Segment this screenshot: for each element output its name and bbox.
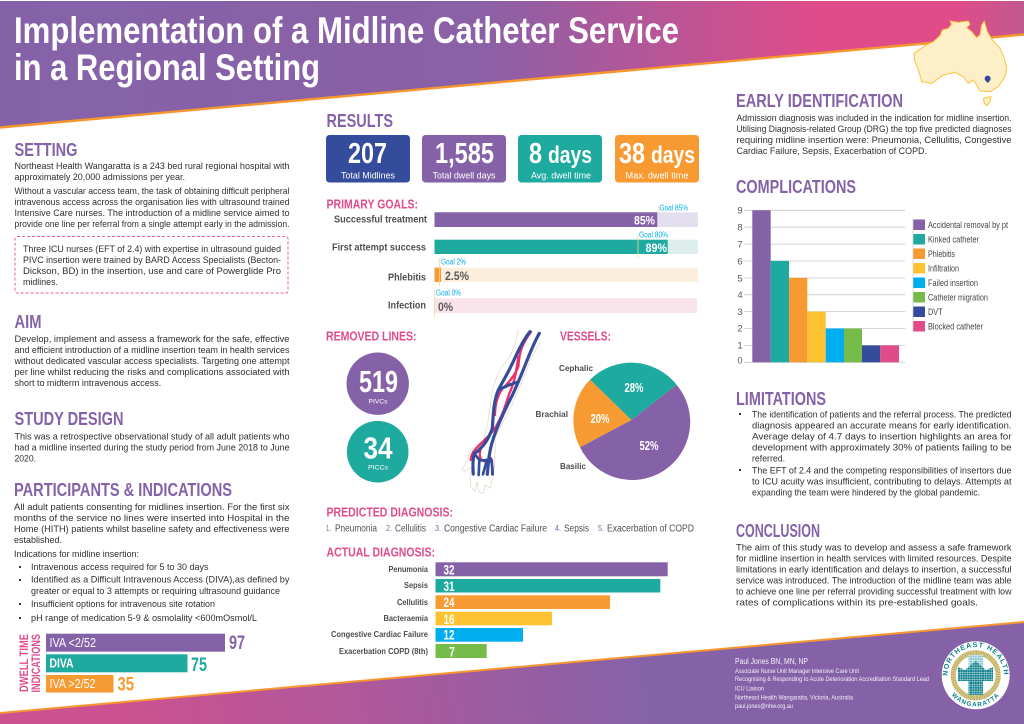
legend: complications: Infiltration [928, 264, 959, 274]
bar chart: dwell time indications: DIVA [50, 656, 74, 670]
author contact details: Paul Jones BN, MN, NP [735, 657, 808, 666]
section: participants and indications: greater or equal to 3 attempts or requiring ultrasound guidance [31, 586, 280, 597]
bar chart: complications: 1 [737, 340, 743, 352]
row: first attempt success: First attempt success [332, 242, 426, 254]
section: limitations: LIMITATIONS [736, 389, 826, 409]
heading: primary goals: PRIMARY GOALS: [326, 198, 418, 212]
stat card: max dwell time [615, 135, 699, 182]
section: participants and indications: Insufficient options for intravenous site rotation [31, 599, 215, 610]
section: participants and indications: All adult patients consenting for midlines insertion. For the first six [14, 502, 290, 513]
bar chart: dwell time indications: IVA <2/52 [50, 636, 96, 650]
section: conclusion [736, 521, 1012, 608]
pie chart: vessels: 20% [590, 411, 610, 426]
section: participants and indications: Indications for midline insertion: [14, 549, 139, 560]
section: limitations: referred. [752, 454, 785, 464]
row: infection [388, 288, 697, 317]
list: predicted diagnoses [326, 524, 694, 534]
bar chart: dwell time indications: 97 [229, 633, 245, 654]
section: participants and indications: Identified as a Difficult Intravenous Access (DIVA),as defined by [31, 575, 290, 586]
row: first attempt success [332, 230, 698, 258]
row: first attempt success: 89% [646, 241, 667, 255]
bar chart: actual diagnosis: Sepsis [404, 580, 428, 590]
list: predicted diagnoses: 3. [435, 524, 441, 533]
row: infection: 0% [438, 300, 453, 314]
title [14, 9, 679, 88]
section: aim: and efficient introduction of a midline insertion team in health services [14, 345, 290, 356]
row: phlebitis [388, 258, 698, 286]
section: participants and indications: established. [14, 535, 62, 546]
bar chart: complications [737, 206, 1008, 366]
row: successful treatment: Goal 85% [660, 204, 688, 212]
bar chart: actual diagnosis: Cellulitis [397, 597, 428, 607]
pie chart: vessels [536, 363, 690, 480]
section: early identification: Cardiac Failure, Sepsis, Exacerbation of COPD. [736, 146, 927, 157]
stat card: average dwell time [518, 135, 602, 182]
legend: complications: Kinked catheter [928, 234, 979, 244]
section: aim: short to midterm intravenous access. [14, 378, 161, 389]
section: setting: provide one line per referral from a single attempt early in the admission. [14, 219, 290, 230]
bar chart: complications: 2 [737, 324, 743, 334]
author contact details [735, 657, 929, 710]
section: participants and indications: PARTICIPANTS & INDICATIONS [14, 480, 232, 500]
heading: results: RESULTS [326, 111, 393, 131]
row: infection: Goal 0% [436, 288, 461, 298]
section: limitations: The EFT of 2.4 and the competing responsibilities of insertors due [752, 466, 1012, 476]
heading: actual diagnosis: ACTUAL DIAGNOSIS: [326, 546, 435, 560]
stat circle: PIVCs: PIVCs [368, 398, 388, 406]
list: predicted diagnoses: 1. [326, 524, 331, 533]
section: setting: Northeast Health Wangaratta is a 243 bed rural regional hospital with [14, 161, 290, 172]
stat card: total midlines: 207 [348, 138, 387, 170]
heading: complications: COMPLICATIONS [736, 177, 856, 197]
callout: ICU nurses training: PIVC insertion were trained by BARD Access Specialists (Becton- [23, 255, 281, 266]
footer banner [0, 622, 1024, 724]
bar chart: dwell time indications: 35 [118, 674, 134, 696]
callout: ICU nurses training: Dickson, BD) in the insertion, use and care of Powerglide Pro [23, 266, 281, 277]
bar chart: dwell time indications: IVA >2/52 [50, 677, 96, 691]
section: participants and indications: Home (HITH) patients whilst baseline safety and effectiveness were [14, 524, 290, 535]
section: early identification: requiring midline insertion were: Pneumonia, Cellulitis, Congestive [736, 135, 1012, 146]
row: successful treatment [334, 204, 698, 228]
pie chart: vessels: 28% [624, 380, 644, 395]
section: limitations: Average delay of 4.7 days to insertion highlights an area for [752, 432, 1012, 442]
bar chart: complications: 4 [737, 290, 743, 301]
legend: complications: DVT [928, 307, 943, 317]
bar chart: actual diagnosis: Exacerbation COPD (8th) [339, 646, 428, 656]
stat circle: PICCs: 34 [364, 430, 393, 466]
list: predicted diagnoses: Congestive Cardiac Failure [444, 524, 547, 534]
bar chart: complications: 9 [737, 206, 743, 216]
stat card: average dwell time: days [548, 142, 592, 169]
bar chart: actual diagnosis: 32 [444, 562, 455, 578]
row: successful treatment: Successful treatment [334, 214, 428, 226]
row: phlebitis: Phlebitis [388, 272, 426, 284]
logo: Northeast Health Wangaratta: NORTHEAST HEALTH [942, 642, 1009, 676]
section: participants and indications: Intravenous access required for 5 to 30 days [31, 562, 209, 573]
section: limitations: diagnosis appeared an accurate means for early identification. [752, 420, 1012, 432]
row: phlebitis: Goal 2% [441, 258, 466, 266]
section: study design: STUDY DESIGN [14, 409, 124, 429]
section: limitations: expanding the team were hindered by the global pandemic. [752, 488, 980, 498]
stat card: total dwell days: 1,585 [435, 138, 494, 170]
section: limitations: to ICU acuity was insufficient, contributing to delays. Attempts at [752, 476, 1012, 488]
section: participants and indications [14, 480, 290, 624]
header banner [0, 1, 1024, 128]
pie chart: vessels: Cephalic [559, 363, 593, 373]
author contact details: paul.jones@nhw.org.au [735, 703, 793, 710]
bar chart: actual diagnosis: 16 [444, 611, 455, 627]
stat circle: PIVCs [346, 352, 409, 415]
legend: complications: Catheter migration [928, 292, 988, 302]
bar chart: actual diagnosis: 31 [444, 578, 455, 594]
section: conclusion: to achieve one line per referral providing successful treatment with low [736, 586, 1012, 598]
list: predicted diagnoses: Exacerbation of COPD [607, 524, 694, 534]
section: setting: Without a vascular access team, the task of obtaining difficult peripheral [14, 186, 290, 197]
list: predicted diagnoses: 4. [555, 524, 561, 533]
bar chart: actual diagnosis: 7 [449, 644, 455, 660]
bar chart: actual diagnosis [331, 562, 668, 660]
section: conclusion: CONCLUSION [736, 521, 820, 541]
bar chart: dwell time indications: 75 [191, 655, 207, 676]
section: setting: intravenous access across the organisation lies with ultrasound trained [14, 197, 290, 208]
section: study design: This was a retrospective observational study of all adult patients who [14, 431, 290, 442]
bar chart: dwell time indications: DWELL TIME [17, 634, 31, 692]
author contact details: ICU Liaison [735, 686, 764, 692]
section: conclusion: rates of complications within its pre-established goals. [736, 598, 978, 608]
section: participants and indications: months of the service no lines were inserted into Hospital in the [14, 513, 290, 524]
bar chart: actual diagnosis: Penumonia [388, 564, 428, 574]
stat card: total dwell days: Total dwell days [432, 170, 496, 182]
legend: complications: Phlebitis [928, 249, 955, 259]
list: predicted diagnoses: Sepsis [564, 524, 589, 534]
stat circle: PIVCs: 519 [359, 364, 398, 399]
list: predicted diagnoses: Pneumonia [335, 524, 377, 534]
title: Implementation of a Midline Catheter Service [14, 9, 679, 51]
stat card: average dwell time: 8 [529, 138, 542, 170]
stat circle: PICCs [347, 421, 409, 483]
section: setting: SETTING [14, 140, 78, 160]
bar chart: dwell time indications [17, 633, 245, 696]
list: predicted diagnoses: 5. [598, 524, 604, 533]
bar chart: actual diagnosis: 24 [444, 594, 455, 610]
stat card: max dwell time: days [651, 142, 695, 169]
section: study design [14, 409, 290, 464]
icon: map of Australia [914, 21, 1007, 106]
section: setting: approximately 20,000 admissions per year. [14, 172, 185, 183]
section: setting [14, 140, 290, 230]
stat card: average dwell time: Avg. dwell time [531, 170, 591, 182]
stat card: total midlines [326, 135, 410, 182]
section: conclusion: The aim of this study was to develop and assess a safe framework [736, 542, 1012, 554]
bar chart: complications: 3 [737, 307, 743, 318]
bar chart: actual diagnosis: Bacteraemia [384, 613, 428, 623]
section: aim [14, 312, 290, 389]
bar chart: complications: 0 [737, 356, 743, 366]
list: predicted diagnoses: Cellulitis [395, 524, 426, 534]
row: phlebitis: 2.5% [445, 269, 469, 283]
title: in a Regional Setting [14, 46, 320, 88]
row: successful treatment: 85% [634, 214, 655, 228]
bar chart: complications: 6 [737, 256, 743, 268]
section: study design: 2020. [14, 453, 36, 464]
stat card: total dwell days [422, 135, 506, 182]
logo: Northeast Health Wangaratta: WANGARATTA [952, 692, 999, 706]
section: aim: without dedicated vascular access specialists. Targeting one attempt [14, 356, 290, 367]
stat card: total midlines: Total Midlines [341, 170, 395, 182]
legend: complications: Accidental removal by pt [928, 220, 1008, 230]
section: aim: AIM [14, 312, 42, 332]
section: limitations: development with approximately 30% of patients failing to be [752, 442, 1012, 454]
list: predicted diagnoses: 2. [386, 524, 392, 533]
author contact details: Northeast Health Wangaratta, Victoria, Australia [735, 694, 853, 702]
section: aim: per line whilst reducing the risks and complications associated with [14, 367, 290, 378]
logo: Northeast Health Wangaratta [942, 641, 1010, 710]
stat circle: PICCs: PICCs [368, 464, 389, 472]
row: infection: Infection [388, 300, 426, 312]
section: study design: had a midline inserted during the study period from June 2018 to June [14, 442, 290, 453]
section: participants and indications: pH range of medication 5-9 & osmolality <600mOsmol/L [31, 613, 257, 624]
author contact details: Recognising & Responding to Acute Deterioration Accreditation Standard Lead [735, 676, 929, 683]
bar chart: complications: 7 [737, 240, 743, 250]
section: limitations [736, 389, 1012, 498]
heading: removed lines: REMOVED LINES: [326, 330, 416, 344]
bar chart: actual diagnosis: 12 [444, 626, 455, 642]
heading: predicted diagnosis: PREDICTED DIAGNOSIS: [326, 506, 453, 520]
bar chart: actual diagnosis: Congestive Cardiac Failure [331, 629, 428, 639]
section: setting: Intensive Care nurses. The introduction of a midline service aimed to [14, 208, 290, 219]
callout: ICU nurses training [15, 236, 288, 293]
pie chart: vessels: Brachial [536, 409, 568, 419]
section: early identification [736, 91, 1012, 157]
chart: primary goals progress bars [332, 204, 698, 317]
legend: complications: Failed insertion [928, 278, 978, 288]
section: aim: Develop, implement and assess a framework for the safe, effective [14, 334, 290, 345]
heading: vessels: VESSELS: [560, 330, 611, 344]
pie chart: vessels: 52% [640, 438, 659, 453]
callout: ICU nurses training: Three ICU nurses (EFT of 2.4) with expertise in ultrasound guided [23, 244, 281, 255]
icon: arm with veins [462, 330, 540, 493]
pie chart: vessels: Basilic [560, 461, 586, 471]
row: first attempt success: Goal 80% [639, 230, 668, 240]
section: conclusion: for midline insertion in health services with limited resources. Despite [736, 554, 1012, 564]
section: conclusion: service was introduced. The introduction of the midline team was able [736, 576, 1012, 586]
bar chart: complications: 5 [737, 274, 743, 284]
author contact details: Associate Nurse Unit Manager Intensive Care Unit [735, 668, 859, 675]
legend: complications: Blocked catheter [928, 322, 983, 332]
stat card: max dwell time: Max. dwell time [626, 170, 688, 182]
section: early identification: EARLY IDENTIFICATION [736, 91, 903, 111]
bar chart: complications: 8 [737, 222, 743, 234]
section: conclusion: limitations in early identification and delays to insertion, a successful [736, 564, 1012, 576]
callout: ICU nurses training: midlines. [23, 277, 58, 288]
stat card: max dwell time: 38 [619, 138, 645, 170]
bar chart: dwell time indications: INDICATIONS [29, 634, 43, 692]
legend: complications [913, 218, 1008, 332]
